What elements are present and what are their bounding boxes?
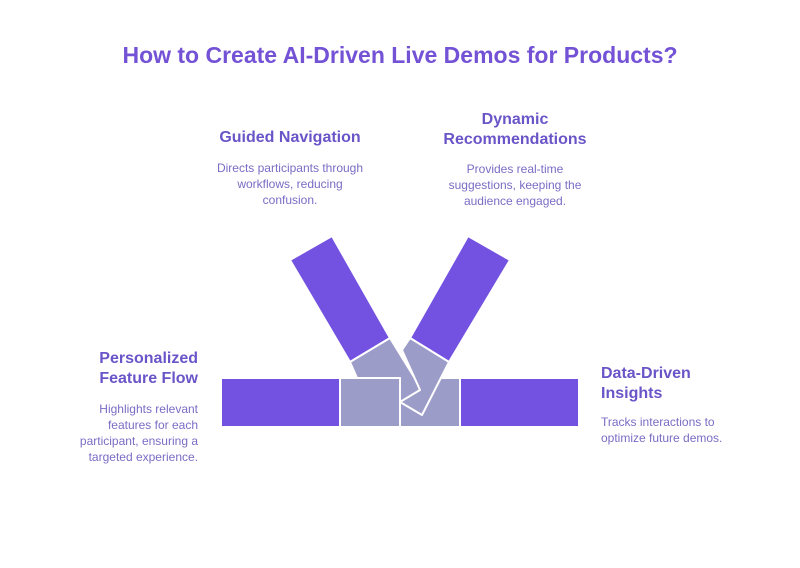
- joint right-middle: [400, 378, 460, 427]
- label: personalized feature flow: features for each: [108, 418, 198, 432]
- label: data-driven insights: Tracks interactions to: [601, 415, 715, 429]
- label: dynamic recommendations: suggestions, keeping the: [449, 178, 581, 192]
- label: guided navigation: Directs participants through: [217, 161, 363, 175]
- tilted bar left: [290, 236, 422, 402]
- tilted bar right: [400, 236, 510, 415]
- label: personalized feature flow: [80, 350, 198, 464]
- label: data-driven insights: Insights: [601, 385, 662, 402]
- bar left: [221, 378, 340, 427]
- title: How to Create AI-Driven Live Demos for Products?: [122, 42, 678, 68]
- label: personalized feature flow: participant, ensuring a: [80, 434, 198, 448]
- label: dynamic recommendations: Provides real-time: [467, 162, 563, 176]
- label: dynamic recommendations: [443, 111, 587, 208]
- joint left-middle: [340, 378, 400, 427]
- label: personalized feature flow: targeted experience.: [89, 450, 198, 464]
- label: guided navigation: Guided Navigation: [219, 129, 361, 146]
- label: guided navigation: confusion.: [263, 193, 317, 207]
- label: dynamic recommendations: Recommendations: [443, 131, 587, 148]
- label: personalized feature flow: Personalized: [99, 350, 198, 367]
- label: guided navigation: workflows, reducing: [237, 177, 343, 191]
- label: data-driven insights: optimize future demos.: [601, 431, 722, 445]
- label: personalized feature flow: Feature Flow: [99, 370, 198, 387]
- label: guided navigation: [217, 129, 363, 207]
- label: personalized feature flow: Highlights relevant: [99, 402, 198, 416]
- label: dynamic recommendations: Dynamic: [482, 111, 548, 128]
- label: dynamic recommendations: audience engaged.: [464, 194, 566, 208]
- label: data-driven insights: [601, 365, 722, 445]
- bar right: [460, 378, 579, 427]
- label: data-driven insights: Data-Driven: [601, 365, 691, 382]
